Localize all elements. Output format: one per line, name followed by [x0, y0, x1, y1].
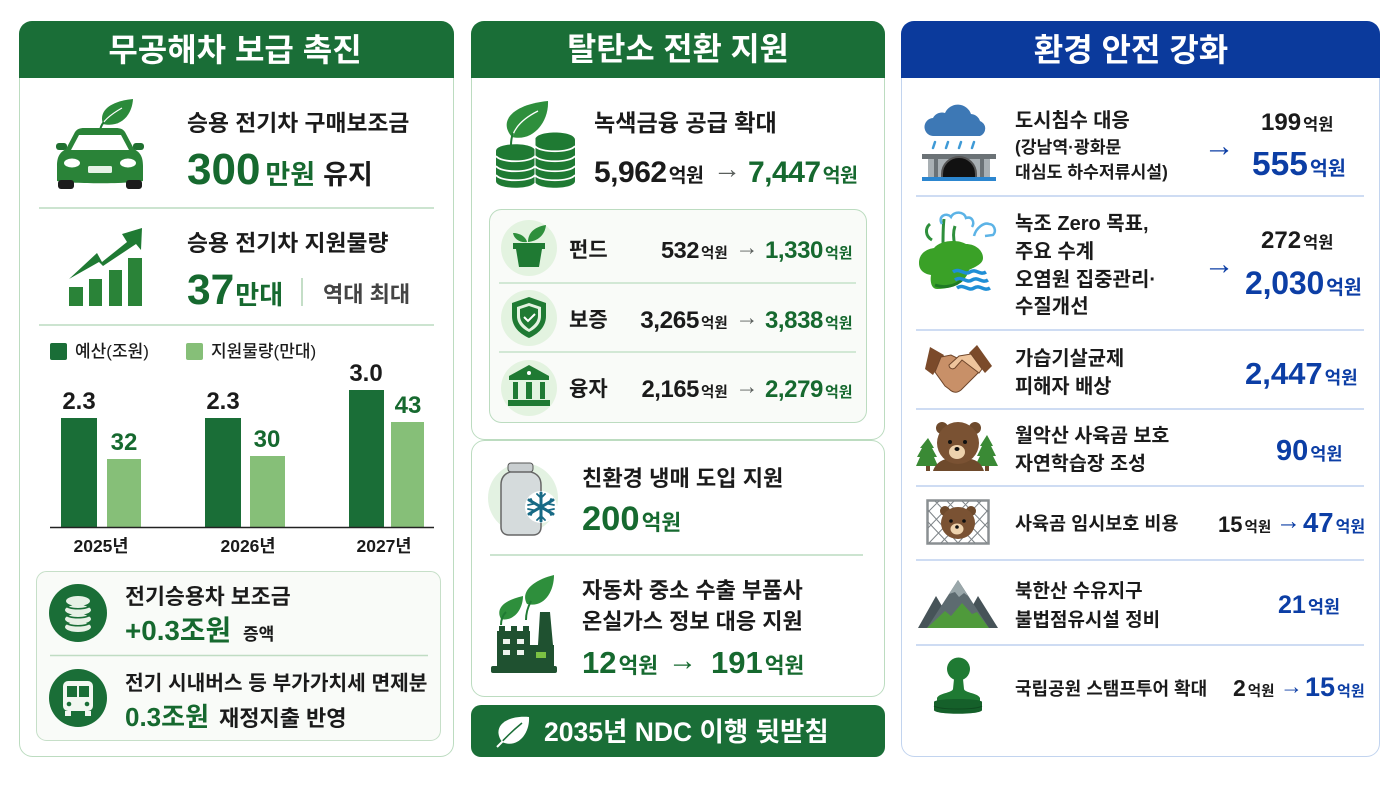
text: 구매보조금: 승용 전기차 구매보조금	[187, 110, 409, 136]
chart legend	[50, 342, 316, 361]
bar chart: 예산 및 지원물량: 30	[254, 426, 280, 453]
text: 부품사 지원: 191억원	[711, 645, 804, 680]
text: 시내버스 부가가치세	[125, 672, 427, 732]
text: 친환경 냉매	[582, 466, 783, 538]
text: 가습기살균제	[1015, 348, 1124, 398]
text: 친환경 냉매: 친환경 냉매 도입 지원	[582, 466, 783, 491]
value: 2 to 15: 2억원	[1233, 675, 1274, 701]
icon: handshake	[925, 345, 992, 392]
header: 탈탄소 전환 지원	[471, 21, 885, 78]
bar chart: 예산 및 지원물량: 43	[395, 392, 421, 419]
bar chart: 예산 및 지원물량: 2026년	[220, 536, 276, 556]
panel: 탈탄소 전환 지원	[471, 21, 885, 440]
text: 도시침수 대응: 대심도 하수저류시설)	[1015, 162, 1168, 182]
header: 환경 안전 강화	[901, 21, 1380, 78]
row: 보증: →	[736, 304, 758, 330]
text: 지원물량	[187, 230, 410, 314]
text: 시내버스 부가가치세: 전기 시내버스 등 부가가치세 면제분	[125, 672, 427, 695]
icon: factory with leaves	[491, 575, 557, 673]
icon: caged bear	[928, 500, 988, 544]
chart legend: 지원물량(만대)	[211, 342, 316, 361]
text: 월악산	[1015, 425, 1169, 475]
icon: refrigerant bottle	[488, 463, 558, 535]
arrow: →	[1204, 246, 1234, 281]
text: 구매보조금: 300만원 유지	[187, 145, 373, 194]
row: 융자: 2,165	[641, 376, 699, 403]
value: 2 to 15	[1233, 672, 1365, 702]
text: 시내버스 부가가치세: 0.3조원 재정지출 반영	[125, 702, 347, 732]
chart legend: 예산(조원)	[75, 342, 149, 361]
banner: 2035년 NDC	[471, 705, 885, 757]
row: 융자: 억원	[825, 384, 853, 401]
icon: stamp	[934, 658, 982, 714]
header: 환경 안전 강화: 환경 안전 강화	[1034, 32, 1228, 68]
header: 무공해차 보급 촉진	[19, 21, 454, 78]
value: 199 to 555: 555억원	[1252, 146, 1346, 183]
value: 2 to 15: 15억원	[1305, 672, 1365, 702]
text: 국립공원: 국립공원 스탬프투어 확대	[1015, 679, 1207, 699]
value: 15 to 47: 47억원	[1303, 507, 1365, 538]
text: 사육곰 임시보호: 사육곰 임시보호 비용	[1015, 513, 1178, 534]
text: 부품사 지원	[582, 578, 804, 680]
row: 보증: 억원	[825, 315, 853, 332]
row: 융자: 억원	[701, 384, 728, 401]
value: 21: 21억원	[1278, 591, 1340, 619]
text: 전기승용차 보조금	[125, 584, 291, 646]
header: 무공해차 보급 촉진: 무공해차 보급 촉진	[108, 32, 362, 68]
panel: 무공해차 보급 촉진	[19, 21, 454, 756]
text: 녹조 Zero: 수질개선	[1015, 295, 1089, 318]
text: 지원물량: 37만대	[187, 267, 283, 314]
row: 펀드: 1,330	[765, 237, 823, 264]
text: 친환경 냉매: 200억원	[582, 500, 681, 538]
text: 가습기살균제: 가습기살균제	[1015, 348, 1124, 370]
bar chart: 예산 및 지원물량: 3.0	[349, 360, 383, 387]
row: 보증: 3,838	[765, 307, 823, 334]
value: 90: 90억원	[1276, 435, 1342, 467]
value: 15 to 47: 15억원	[1218, 512, 1271, 537]
icon: leaf	[497, 717, 529, 747]
box: 펀드 보증 융자	[490, 210, 866, 422]
text: 도시침수 대응: (강남역·광화문	[1015, 137, 1122, 157]
value: 15 to 47: →	[1276, 507, 1301, 535]
icon: rising bar chart arrow	[69, 228, 142, 306]
value: 272 to 2,030: 272억원	[1261, 227, 1333, 254]
banner: 2035년 NDC: 2035년 NDC 이행 뒷받침	[544, 717, 829, 747]
icon: cloud and sewer tunnel	[922, 105, 996, 181]
text: 월악산: 월악산 사육곰 보호	[1015, 425, 1169, 447]
value: 199 to 555	[1252, 109, 1346, 183]
value: 15 to 47	[1218, 507, 1365, 538]
text: 부품사 지원: 12억원	[582, 645, 658, 680]
text: 전기승용차 보조금: +0.3조원 증액	[125, 615, 274, 646]
text: 부품사 지원: 자동차 중소 수출 부품사	[582, 578, 803, 603]
text: 부품사 지원: 온실가스 정보 대응 지원	[582, 609, 803, 634]
text: 전기승용차 보조금: 전기승용차 보조금	[125, 584, 291, 609]
text: 북한산	[1015, 580, 1160, 631]
row: 펀드	[569, 234, 853, 264]
row: 보증: 보증	[569, 309, 608, 332]
row: 펀드: 억원	[701, 245, 728, 262]
text: 녹색금융 공급 확대: 7,447억원	[748, 156, 857, 189]
text: 지원물량: 역대 최대	[323, 282, 410, 307]
text: 녹조 Zero: 녹조 Zero 목표,	[1015, 212, 1149, 235]
panel: 환경 안전 강화	[901, 21, 1380, 756]
header: 탈탄소 전환 지원: 탈탄소 전환 지원	[567, 31, 789, 67]
text: 녹색금융 공급 확대: 5,962억원	[594, 156, 703, 189]
text: 녹색금융 공급 확대	[594, 110, 857, 189]
row: 보증: 억원	[701, 315, 728, 332]
bar chart: 예산 및 지원물량: 32	[111, 429, 137, 456]
row: 융자: →	[736, 373, 758, 399]
value: 199 to 555: 199억원	[1261, 109, 1333, 136]
value: 2 to 15: →	[1280, 673, 1303, 699]
icon: bank building	[501, 360, 557, 416]
row: 펀드: 532	[661, 237, 699, 263]
row: 융자: 2,279	[765, 376, 823, 403]
text: 녹조 Zero: 주요 수계	[1015, 240, 1094, 263]
icon: coin stack	[49, 584, 107, 642]
icon: mountain	[918, 580, 998, 628]
icon: green car with leaf	[56, 99, 144, 189]
row: 융자	[569, 373, 853, 403]
text: 월악산: 자연학습장 조성	[1015, 453, 1146, 475]
panel: 냉매 및 부품사 지원	[472, 440, 884, 696]
value: 272 to 2,030	[1245, 227, 1362, 301]
text: 녹조 Zero	[1015, 212, 1156, 318]
icon: coins with leaf	[496, 101, 575, 188]
icon: algae and water	[919, 213, 995, 289]
row: 펀드: 억원	[825, 245, 853, 262]
icon: shield	[501, 290, 557, 346]
row: 융자: 융자	[569, 378, 608, 401]
text: 지원물량: 승용 전기차 지원물량	[187, 230, 388, 256]
row: 보증: 3,265	[640, 307, 699, 334]
arrow: →	[1204, 128, 1234, 163]
bar chart: 예산 및 지원물량: 2.3	[206, 388, 240, 415]
bar chart: 예산 및 지원물량	[50, 360, 434, 556]
text: 도시침수 대응: 도시침수 대응	[1015, 110, 1130, 132]
bar chart: 예산 및 지원물량: 2027년	[356, 536, 412, 556]
row: 펀드: →	[736, 234, 758, 260]
text: 녹색금융 공급 확대: →	[713, 153, 741, 184]
icon: bear with trees	[916, 422, 998, 471]
text: 녹색금융 공급 확대: 녹색금융 공급 확대	[594, 110, 777, 136]
text: 부품사 지원: →	[668, 645, 697, 677]
value: 2,447: 2,447억원	[1245, 356, 1358, 391]
text: 북한산: 북한산 수유지구	[1015, 580, 1143, 602]
bar chart: 예산 및 지원물량: 2.3	[62, 388, 96, 415]
text: 가습기살균제: 피해자 배상	[1015, 376, 1112, 398]
text: 도시침수 대응	[1015, 110, 1168, 182]
bar chart: 예산 및 지원물량: 2025년	[73, 536, 129, 556]
row: 펀드: 펀드	[569, 239, 608, 262]
box: 보조금 및 부가가치세	[36, 572, 440, 740]
value: 272 to 2,030: 2,030억원	[1245, 265, 1362, 301]
icon: bus	[49, 669, 107, 727]
text: 북한산: 불법점유시설 정비	[1015, 609, 1160, 631]
icon: potted plant	[501, 220, 557, 276]
text: 녹조 Zero: 오염원 집중관리·	[1015, 268, 1156, 291]
text: 구매보조금	[187, 110, 409, 194]
row: 보증	[569, 304, 853, 334]
